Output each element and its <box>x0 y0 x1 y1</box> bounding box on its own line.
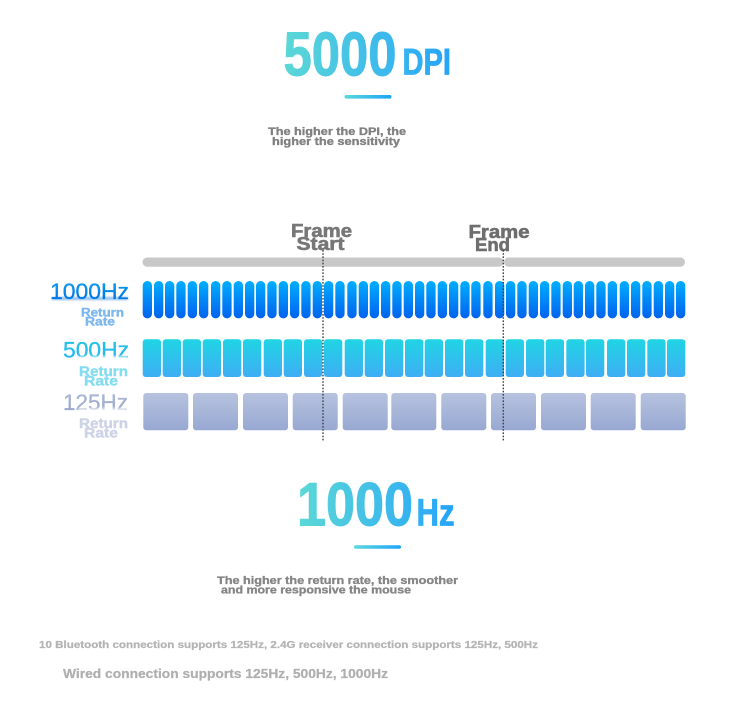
frame start label: Frame <box>291 221 352 241</box>
frame end label: Frame <box>468 222 530 242</box>
label: 125Hz return rate: Rate <box>84 426 119 441</box>
heading: 5000 DPI: 5000 <box>284 20 396 90</box>
label: 500Hz return rate: Return <box>79 364 128 379</box>
label: 500Hz return rate: Rate <box>84 374 119 389</box>
text block: return rate description <box>217 575 459 597</box>
chart: return rate timing comparison <box>50 221 686 442</box>
label: 1000Hz return rate <box>50 279 129 329</box>
heading: 1000 Hz: Hz <box>416 492 454 534</box>
frame end marker line <box>502 250 504 442</box>
panel: return rate heading <box>217 470 459 597</box>
accent underline <box>344 95 392 99</box>
frame end label: End <box>475 235 510 255</box>
heading: 5000 DPI: DPI <box>402 42 451 82</box>
bars: 500Hz <box>143 339 685 377</box>
text block: return rate description: and more responsive the mouse <box>221 585 411 597</box>
label: 125Hz return rate: 125Hz <box>63 390 128 415</box>
label: 1000Hz return rate: Return <box>81 306 124 320</box>
bars: 1000Hz <box>143 281 685 318</box>
text block: DPI description <box>268 126 406 148</box>
panel: DPI heading <box>268 20 451 148</box>
frame end label <box>468 222 530 255</box>
footnote line: Bluetooth and 2.4G: 10 Bluetooth connection supports 125Hz, 2.4G receiver connection supports 125Hz, 500Hz <box>39 640 538 651</box>
label: 500Hz return rate <box>63 338 129 389</box>
footnote: connection support <box>39 640 538 681</box>
label: 1000Hz return rate: Rate <box>85 315 115 329</box>
text block: return rate description: The higher the return rate, the smoother <box>217 575 459 587</box>
text block: DPI description: The higher the DPI, the <box>268 126 406 138</box>
frame start label <box>291 221 352 254</box>
label: 125Hz return rate <box>63 390 128 441</box>
heading: 1000 Hz: 1000 <box>297 470 413 538</box>
label: 1000Hz return rate: 1000Hz <box>50 279 129 304</box>
bars: 125Hz <box>143 393 686 430</box>
accent underline <box>354 545 401 549</box>
label: 500Hz return rate: 500Hz <box>63 338 129 363</box>
frame start marker line <box>322 250 324 442</box>
text block: DPI description: higher the sensitivity <box>272 136 401 148</box>
footnote line: wired: Wired connection supports 125Hz, 500Hz, 1000Hz <box>63 666 389 681</box>
frame start label: Start <box>296 234 344 254</box>
frame timeline bar <box>142 258 685 267</box>
label: 125Hz return rate: Return <box>79 416 128 431</box>
